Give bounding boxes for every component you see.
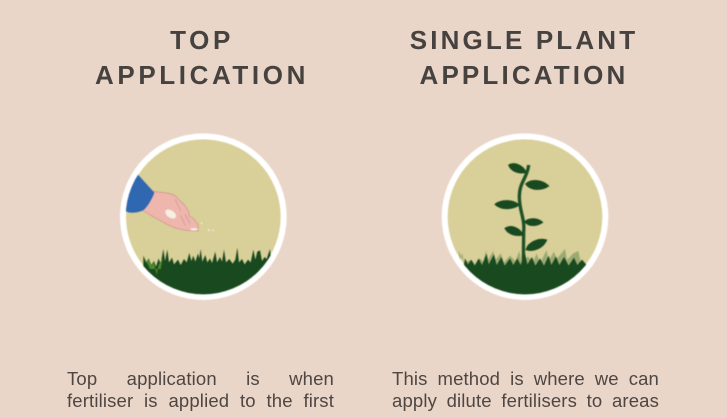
heading: top application: TOP <box>170 25 234 55</box>
fertiliser granules <box>164 208 214 231</box>
heading: top application: APPLICATION <box>95 60 309 90</box>
plant leaves <box>495 164 549 250</box>
text block: single plant application description: apply dilute fertilisers to areas <box>392 390 659 411</box>
text block: single plant application description: This method is where we can <box>392 368 659 389</box>
grass <box>142 248 272 296</box>
heading: single plant application <box>410 25 638 90</box>
heading: top application <box>95 25 309 90</box>
icon: hand scattering fertiliser over grass <box>120 136 284 302</box>
hand <box>142 191 198 231</box>
heading: single plant application: SINGLE PLANT <box>410 25 638 55</box>
text block: top application description: fertiliser is applied to the first <box>67 390 334 411</box>
heading: single plant application: APPLICATION <box>420 60 628 90</box>
icon: young plant growing from grass <box>445 136 605 302</box>
text block: single plant application description <box>392 368 659 411</box>
text block: top application description: Top application is when <box>67 368 334 389</box>
plant stem <box>519 165 529 262</box>
text block: top application description <box>67 368 334 411</box>
grass <box>458 249 581 266</box>
sleeve <box>120 175 154 213</box>
